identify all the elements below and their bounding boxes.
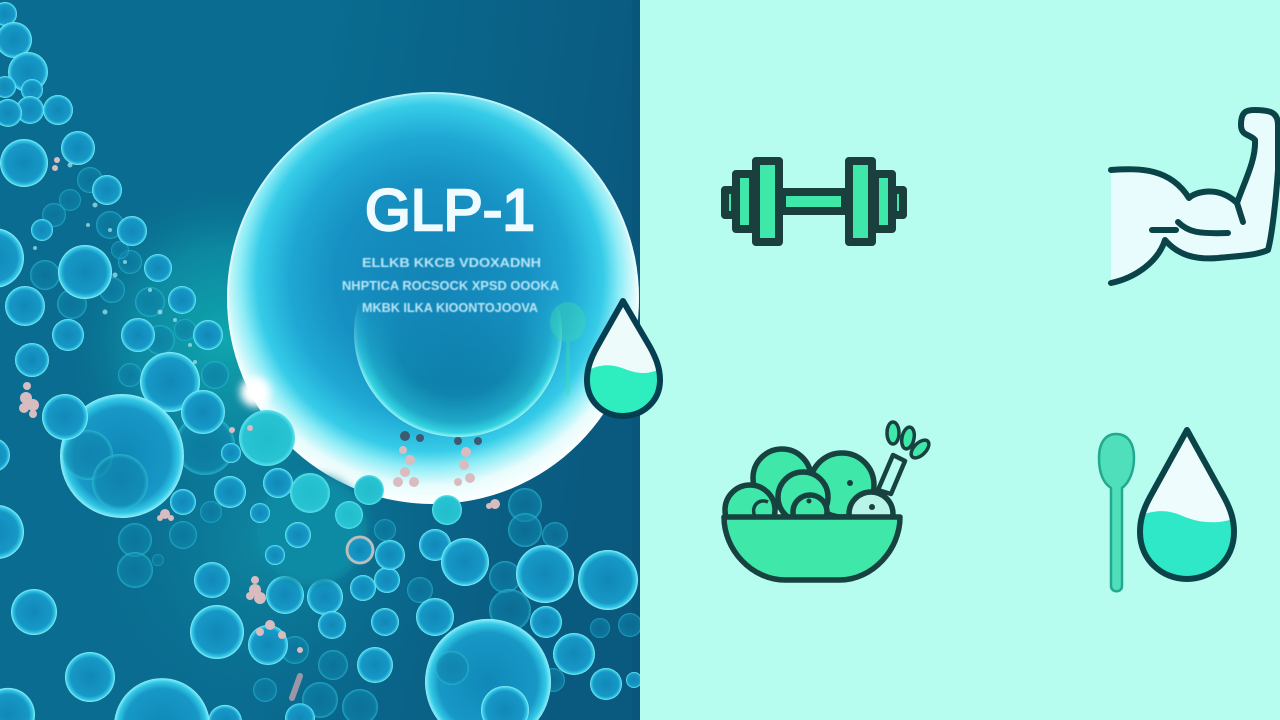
panel: molecular background bbox=[0, 0, 642, 720]
icon: flexed arm bbox=[1111, 110, 1278, 283]
icon: water drop overlapping sphere bbox=[585, 301, 662, 420]
large bubbles bbox=[42, 394, 551, 720]
title: GLP-1: GLP-1 bbox=[365, 178, 535, 243]
sphere caption text: MKBK ILKA KIOONTOJOOVA bbox=[362, 301, 538, 315]
panel: light aqua background bbox=[640, 0, 1280, 720]
icon: spoon bbox=[1099, 434, 1134, 591]
molecule clusters bbox=[19, 157, 500, 698]
sphere caption text: NHPTICA ROCSOCK XPSD OOOKA bbox=[342, 279, 559, 293]
bubble field bbox=[0, 2, 642, 720]
sphere caption text bbox=[342, 256, 559, 315]
main GLP-1 sphere bbox=[227, 92, 639, 504]
faint spoon inside sphere bbox=[550, 302, 586, 395]
foreground bubbles over sphere bbox=[170, 390, 462, 585]
sphere caption text: ELLKB KKCB VDOXADNH bbox=[362, 256, 541, 270]
icon: large water drop bbox=[1135, 430, 1238, 585]
icon: salad bowl bbox=[724, 422, 932, 580]
inner sphere bbox=[354, 306, 562, 437]
faint background bubbles bbox=[30, 167, 642, 718]
icon: dumbbell bbox=[725, 161, 903, 242]
